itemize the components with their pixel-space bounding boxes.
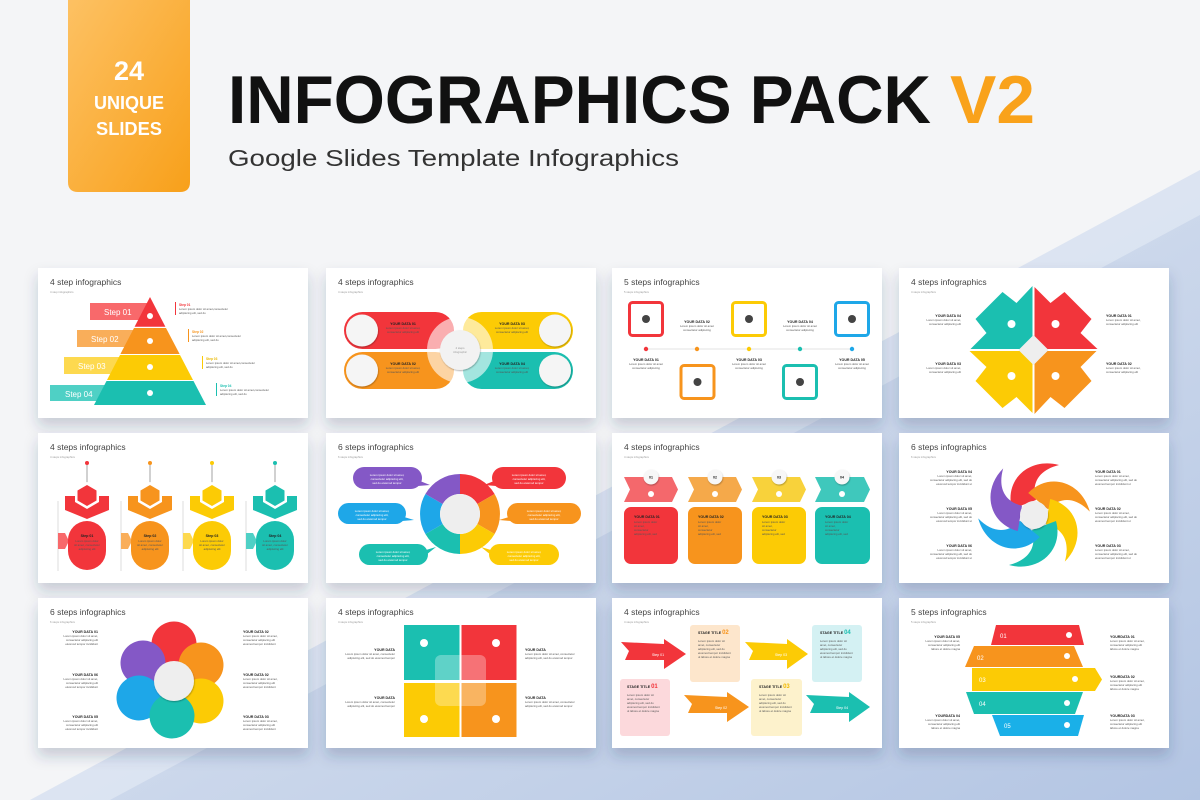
badge: 24 unique slides: SLIDES	[96, 119, 162, 139]
panel: slide 11 arrows and stages: Lorem ipsum dolor sit	[698, 639, 725, 643]
panel: slide 3 five steps: YOUR DATA 03	[736, 358, 762, 362]
panel: slide 1 pyramid: adipiscing elit, sed do	[192, 338, 219, 342]
panel: slide 2 capsules: YOUR DATA 02	[390, 362, 416, 366]
panel: slide 2 capsules	[326, 268, 596, 418]
panel: slide 9 flower: YOUR DATA 03	[243, 715, 269, 719]
panel: slide 7 chevrons and boxes: adipiscing elit, sed	[634, 532, 657, 536]
panel: slide 1 pyramid: Lorem ipsum dolor sit amet,consectetur	[192, 334, 241, 338]
panel: slide 9 flower: Lorem ipsum dolor sit amet,	[243, 634, 278, 638]
panel: slide 2 capsules: YOUR DATA 04	[499, 362, 525, 366]
panel: slide 11 arrows and stages: Lorem ipsum dolor sit	[759, 693, 786, 697]
panel: slide 12 hexagon bars: Lorem ipsum dolor sit amet,	[1110, 639, 1145, 643]
subtitle: Google Slides Template Infographics	[228, 145, 679, 171]
panel: slide 2 capsules: Lorem ipsum dolor sit amet,	[386, 326, 420, 330]
panel: slide 9 flower: eiusmod tempor incididunt	[65, 642, 98, 646]
panel: slide 12 hexagon bars: labore et dolore magna	[1110, 726, 1139, 730]
title: INFOGRAPHICS PACK	[228, 62, 931, 138]
panel: slide 11 arrows and stages: 4 steps infographics	[624, 620, 649, 624]
panel: slide 5 hexagon columns: 4 steps infographics	[50, 442, 126, 452]
panel: slide 9 flower: consectetur adipiscing elit	[243, 681, 275, 685]
panel: slide 7 chevrons and boxes: sit amet,	[634, 524, 645, 528]
panel: slide 4 cross: YOUR DATA 03	[935, 362, 961, 366]
panel: slide 9 flower: consectetur adipiscing elit	[66, 681, 98, 685]
panel: slide 2 capsules: YOUR DATA 01	[390, 322, 416, 326]
panel: slide 2 capsules: 4 steps infographics	[338, 290, 363, 294]
panel: slide 2 capsules: Lorem ipsum dolor sit amet,	[386, 366, 420, 370]
panel: slide 11 arrows and stages: amet, consectetur	[698, 643, 720, 647]
panel: slide 11 arrows and stages: Step 02	[715, 706, 727, 710]
panel: slide 10 quad: YOUR DATA	[374, 648, 395, 652]
panel: slide 5 hexagon columns: sit amet, consectetur	[74, 543, 100, 547]
panel: slide 1 pyramid: Step 01	[179, 303, 191, 307]
panel: slide 11 arrows and stages: eiusmod tempor incididunt	[820, 651, 853, 655]
panel: slide 8 spiral: eiusmod tempor incididunt ut	[936, 482, 972, 486]
panel: slide 10 quad: YOUR DATA	[374, 696, 395, 700]
panel: slide 3 five steps: consectetur adipiscing	[838, 366, 866, 370]
panel: slide 4 cross: YOUR DATA 01	[1106, 314, 1132, 318]
panel: slide 12 hexagon bars: labore et dolore magna	[1110, 687, 1139, 691]
panel: slide 8 spiral: YOUR DATA 06	[946, 544, 972, 548]
panel: slide 12 hexagon bars: YOURDATA 04	[935, 714, 960, 718]
panel: slide 7 chevrons and boxes: 4 steps infographics	[624, 455, 649, 459]
panel: slide 11 arrows and stages: 4 steps infographics	[624, 607, 700, 617]
panel: slide 1 pyramid: Step 03	[206, 357, 218, 361]
panel: slide 12 hexagon bars: consectetur adipiscing elit	[1110, 683, 1142, 687]
panel: slide 8 spiral: consectetur adipiscing elit, sed do	[930, 515, 972, 519]
panel: slide 4 cross: consectetur adipiscing elit	[929, 322, 961, 326]
panel: slide 4 cross: 4 steps infographics	[911, 290, 936, 294]
panel: slide 2 capsules: consectetur adipiscing elit	[496, 370, 528, 374]
panel: slide 6 donut with bubbles: Lorem ipsum dolor sit amet,	[527, 509, 561, 513]
panel: slide 5 hexagon columns: adipiscing elit	[204, 547, 221, 551]
panel: slide 12 hexagon bars: 02	[977, 656, 984, 662]
panel: slide 11 arrows and stages: ut labore et dolore magna	[820, 655, 852, 659]
panel: slide 6 donut with bubbles: 6 steps infographics	[338, 442, 414, 452]
panel: slide 1 pyramid: Step 02	[192, 330, 204, 334]
panel: slide 11 arrows and stages: adipiscing elit, sed do	[820, 647, 847, 651]
panel: slide 2 capsules: Lorem ipsum dolor sit amet,	[495, 326, 529, 330]
panel: slide 11 arrows and stages: amet, consectetur	[759, 697, 781, 701]
panel: slide 8 spiral: consectetur adipiscing elit, sed do	[930, 478, 972, 482]
panel: slide 11 arrows and stages: ut labore et dolore magna	[627, 709, 659, 713]
panel: slide 12 hexagon bars: Lorem ipsum dolor sit amet,	[925, 639, 960, 643]
panel: slide 9 flower: consectetur adipiscing elit	[66, 638, 98, 642]
panel: slide 12 hexagon bars: consectetur adipiscing elit	[928, 722, 960, 726]
panel: slide 9 flower: eiusmod tempor incididunt	[243, 642, 276, 646]
panel: slide 3 five steps: consectetur adipiscing	[735, 366, 763, 370]
panel: slide 11 arrows and stages: adipiscing elit, sed do	[698, 647, 725, 651]
panel: slide 10 quad: Lorem ipsum dolor sit amet, consectetur	[525, 700, 575, 704]
panel: slide 11 arrows and stages: ut labore et dolore magna	[698, 655, 730, 659]
panel: slide 1 pyramid: Lorem ipsum dolor sit amet,consectetur	[206, 361, 255, 365]
panel: slide 6 donut with bubbles: consectetur adipiscing elit,	[528, 513, 561, 517]
panel: slide 9 flower: consectetur adipiscing elit	[243, 723, 275, 727]
panel: slide 6 donut with bubbles	[326, 433, 596, 583]
panel: slide 7 chevrons and boxes: 4 steps infographics	[624, 442, 700, 452]
panel: slide 4 cross: Lorem ipsum dolor sit amet,	[1106, 318, 1141, 322]
panel: slide 7 chevrons and boxes	[612, 433, 882, 583]
panel: slide 1 pyramid: Step 03	[78, 362, 106, 371]
panel: slide 4 cross: Lorem ipsum dolor sit amet,	[926, 366, 961, 370]
panel: slide 3 five steps: YOUR DATA 01	[633, 358, 659, 362]
panel: slide 12 hexagon bars: labore et dolore magna	[1110, 647, 1139, 651]
title: V2	[950, 62, 1035, 138]
panel: slide 7 chevrons and boxes: YOUR DATA 04	[825, 515, 851, 519]
panel: slide 8 spiral: YOUR DATA 05	[946, 507, 972, 511]
panel: slide 11 arrows and stages: Step 04	[836, 706, 848, 710]
panel: slide 12 hexagon bars: labore et dolore magna	[931, 647, 960, 651]
panel: slide 8 spiral: 6 steps infographics	[911, 442, 987, 452]
panel: slide 6 donut with bubbles: sed do eiusmod tempor	[357, 517, 387, 521]
panel: slide 8 spiral: consectetur adipiscing elit, sed do	[930, 552, 972, 556]
panel: slide 3 five steps: consectetur adipiscing	[632, 366, 660, 370]
panel: slide 10 quad: 4 steps infographics	[338, 607, 414, 617]
panel: slide 4 cross: YOUR DATA 04	[935, 314, 961, 318]
panel: slide 9 flower: Lorem ipsum dolor sit amet,	[63, 634, 98, 638]
panel: slide 6 donut with bubbles: sed do eiusmod tempor	[514, 481, 544, 485]
badge: 24 unique slides: UNIQUE	[94, 93, 164, 113]
panel: slide 12 hexagon bars: 01	[1000, 634, 1007, 640]
panel: slide 5 hexagon columns: Lorem ipsum dolor	[200, 539, 224, 543]
panel: slide 11 arrows and stages: Lorem ipsum dolor sit	[820, 639, 847, 643]
panel: slide 9 flower: YOUR DATA 06	[72, 673, 98, 677]
panel: slide 5 hexagon columns: Step 01	[81, 534, 93, 538]
panel: slide 7 chevrons and boxes: Lorem ipsum dolor	[634, 520, 657, 524]
panel: slide 4 cross: 4 steps infographics	[911, 277, 987, 287]
panel: slide 8 spiral: eiusmod tempor incididunt ut	[1095, 519, 1131, 523]
panel: slide 8 spiral: YOUR DATA 04	[946, 470, 972, 474]
panel: slide 4 cross: consectetur adipiscing elit	[929, 370, 961, 374]
panel: slide 9 flower: consectetur adipiscing elit	[243, 638, 275, 642]
panel: slide 9 flower: 6 steps infographics	[50, 607, 126, 617]
panel: slide 3 five steps	[612, 268, 882, 418]
panel: slide 10 quad: Lorem ipsum dolor sit amet, consectetur	[525, 652, 575, 656]
panel: slide 7 chevrons and boxes: sit amet,	[825, 524, 836, 528]
panel: slide 5 hexagon columns: Lorem ipsum dolor	[75, 539, 99, 543]
panel: slide 5 hexagon columns: sit amet, consectetur	[262, 543, 288, 547]
panel: slide 7 chevrons and boxes: adipiscing elit, sed	[762, 532, 785, 536]
panel: slide 10 quad: 4 steps infographics	[338, 620, 363, 624]
panel: slide 6 donut with bubbles: sed do eiusmod tempor	[509, 558, 539, 562]
panel: slide 6 donut with bubbles: 6 steps infographics	[338, 455, 363, 459]
panel: slide 5 hexagon columns: Step 02	[144, 534, 156, 538]
panel: slide 7 chevrons and boxes: 02	[713, 476, 717, 480]
panel: slide 3 five steps: Lorem ipsum dolor sit amet	[732, 362, 766, 366]
panel: slide 12 hexagon bars: YOURDATA 02	[1110, 675, 1135, 679]
panel: slide 2 capsules: 4 steps infographics	[338, 277, 414, 287]
panel: slide 10 quad: adipiscing elit, sed do eiusmod tempor	[347, 656, 395, 660]
panel: slide 7 chevrons and boxes: Lorem ipsum dolor	[825, 520, 848, 524]
panel: slide 6 donut with bubbles: consectetur adipiscing elit,	[508, 554, 541, 558]
panel: slide 10 quad: Lorem ipsum dolor sit amet, consectetur	[345, 652, 395, 656]
panel: slide 3 five steps: Lorem ipsum dolor sit amet	[629, 362, 663, 366]
panel: slide 8 spiral: Lorem ipsum dolor sit amet,	[937, 548, 972, 552]
panel: slide 9 flower: 6 steps infographics	[50, 620, 75, 624]
panel: slide 10 quad: YOUR DATA	[525, 648, 546, 652]
panel: slide 4 cross	[899, 268, 1169, 418]
panel: slide 2 capsules: Lorem ipsum dolor sit amet,	[495, 366, 529, 370]
panel: slide 8 spiral: Lorem ipsum dolor sit amet,	[1095, 511, 1130, 515]
panel: slide 5 hexagon columns: adipiscing elit	[142, 547, 159, 551]
panel: slide 11 arrows and stages: Step 01	[652, 653, 664, 657]
panel: slide 10 quad: adipiscing elit, sed do eiusmod tempor	[525, 704, 573, 708]
panel: slide 4 cross: consectetur adipiscing elit	[1106, 322, 1138, 326]
badge: 24 unique slides: 24	[114, 56, 144, 86]
panel: slide 12 hexagon bars: 5 steps infographics	[911, 607, 987, 617]
panel: slide 3 five steps: Lorem ipsum dolor sit amet	[835, 362, 869, 366]
panel: slide 8 spiral: consectetur adipiscing elit, sed do	[1095, 552, 1137, 556]
panel: slide 8 spiral: Lorem ipsum dolor sit amet,	[1095, 474, 1130, 478]
panel: slide 12 hexagon bars: 05	[1004, 724, 1011, 730]
panel: slide 3 five steps: consectetur adipiscing	[786, 328, 814, 332]
panel: slide 6 donut with bubbles: Lorem ipsum dolor sit amet,	[507, 550, 541, 554]
panel: slide 9 flower: YOUR DATA 02	[243, 673, 269, 677]
panel: slide 6 donut with bubbles: consectetur adipiscing elit,	[513, 477, 546, 481]
panel: slide 11 arrows and stages: Lorem ipsum dolor sit	[627, 693, 654, 697]
panel: slide 5 hexagon columns: Lorem ipsum dolor	[138, 539, 162, 543]
panel: slide 10 quad: YOUR DATA	[525, 696, 546, 700]
panel: slide 12 hexagon bars	[899, 598, 1169, 748]
panel: slide 4 cross: YOUR DATA 02	[1106, 362, 1132, 366]
panel: slide 11 arrows and stages: ut labore et dolore magna	[759, 709, 791, 713]
panel: slide 8 spiral: YOUR DATA 03	[1095, 544, 1121, 548]
panel: slide 11 arrows and stages: adipiscing elit, sed do	[759, 701, 786, 705]
panel: slide 6 donut with bubbles: Lorem ipsum dolor sit amet,	[355, 509, 389, 513]
panel: slide 5 hexagon columns: adipiscing elit	[267, 547, 284, 551]
panel: slide 1 pyramid: Step 04	[220, 384, 232, 388]
panel: slide 2 capsules: 4 steps	[455, 346, 465, 350]
panel: slide 7 chevrons and boxes: consectetur	[762, 528, 777, 532]
panel: slide 11 arrows and stages: eiusmod tempor incididunt	[698, 651, 731, 655]
panel: slide 1 pyramid: Step 01	[104, 308, 132, 317]
panel: slide 7 chevrons and boxes: consectetur	[634, 528, 649, 532]
panel: slide 12 hexagon bars: Lorem ipsum dolor sit amet,	[925, 718, 960, 722]
panel: slide 5 hexagon columns: 4 steps infographics	[50, 455, 75, 459]
panel: slide 7 chevrons and boxes: 01	[649, 476, 653, 480]
panel: slide 1 pyramid: adipiscing elit, sed do	[220, 392, 247, 396]
panel: slide 6 donut with bubbles: Lorem ipsum dolor sit amet,	[376, 550, 410, 554]
panel: slide 10 quad: adipiscing elit, sed do eiusmod tempor	[525, 656, 573, 660]
panel: slide 8 spiral: eiusmod tempor incididunt ut	[1095, 556, 1131, 560]
panel: slide 12 hexagon bars: YOUR DATA 05	[934, 635, 960, 639]
panel: slide 7 chevrons and boxes: sit amet,	[762, 524, 773, 528]
panel: slide 9 flower: eiusmod tempor incididunt	[65, 685, 98, 689]
panel: slide 1 pyramid: Lorem ipsum dolor sit amet,consectetur	[220, 388, 269, 392]
panel: slide 9 flower: eiusmod tempor incididunt	[65, 727, 98, 731]
panel: slide 7 chevrons and boxes: adipiscing elit, sed	[825, 532, 848, 536]
panel: slide 6 donut with bubbles: Lorem ipsum dolor sit amet,	[370, 473, 404, 477]
panel: slide 5 hexagon columns: Step 04	[269, 534, 281, 538]
panel: slide 1 pyramid: 4 step infographics	[50, 277, 121, 287]
panel: slide 1 pyramid: adipiscing elit, sed do	[206, 365, 233, 369]
panel: slide 12 hexagon bars: consectetur adipiscing elit	[1110, 722, 1142, 726]
panel: slide 10 quad: Lorem ipsum dolor sit amet, consectetur	[345, 700, 395, 704]
panel: slide 2 capsules: consectetur adipiscing elit	[387, 370, 419, 374]
panel: slide 11 arrows and stages: Step 03	[775, 653, 787, 657]
panel: slide 8 spiral: Lorem ipsum dolor sit amet,	[937, 511, 972, 515]
panel: slide 1 pyramid: 4 step infographics	[50, 290, 74, 294]
panel: slide 11 arrows and stages: STAGE TITLE 02	[698, 630, 729, 636]
panel: slide 3 five steps: 5 steps infographics	[624, 277, 700, 287]
panel: slide 12 hexagon bars: Lorem ipsum dolor sit amet,	[1110, 718, 1145, 722]
panel: slide 11 arrows and stages	[612, 598, 882, 748]
panel: slide 5 hexagon columns: adipiscing elit	[79, 547, 96, 551]
panel: slide 11 arrows and stages: eiusmod tempor incididunt	[627, 705, 660, 709]
panel: slide 6 donut with bubbles: consectetur adipiscing elit,	[377, 554, 410, 558]
panel: slide 8 spiral: eiusmod tempor incididunt ut	[936, 519, 972, 523]
panel: slide 7 chevrons and boxes: sit amet,	[698, 524, 709, 528]
panel: slide 1 pyramid: Step 04	[65, 390, 93, 399]
panel: slide 12 hexagon bars: 03	[979, 678, 986, 684]
panel: slide 10 quad	[326, 598, 596, 748]
panel: slide 2 capsules: infographic	[453, 350, 467, 354]
panel: slide 4 cross: consectetur adipiscing elit	[1106, 370, 1138, 374]
panel: slide 5 hexagon columns: sit amet, consectetur	[137, 543, 163, 547]
panel: slide 7 chevrons and boxes: adipiscing elit, sed	[698, 532, 721, 536]
panel: slide 6 donut with bubbles: sed do eiusmod tempor	[529, 517, 559, 521]
panel: slide 9 flower: YOUR DATA 01	[72, 630, 98, 634]
panel: slide 12 hexagon bars: 04	[979, 702, 986, 708]
panel: slide 8 spiral: Lorem ipsum dolor sit amet,	[1095, 548, 1130, 552]
panel: slide 3 five steps: YOUR DATA 04	[787, 320, 813, 324]
panel: slide 12 hexagon bars: consectetur adipiscing elit	[928, 643, 960, 647]
panel: slide 11 arrows and stages: eiusmod tempor incididunt	[759, 705, 792, 709]
panel: slide 3 five steps: Lorem ipsum dolor sit amet	[783, 324, 817, 328]
panel: slide 3 five steps: YOUR DATA 05	[839, 358, 865, 362]
panel: slide 6 donut with bubbles: consectetur adipiscing elit,	[356, 513, 389, 517]
panel: slide 6 donut with bubbles: Lorem ipsum dolor sit amet,	[512, 473, 546, 477]
panel: slide 9 flower: eiusmod tempor incididunt	[243, 685, 276, 689]
panel: slide 7 chevrons and boxes: consectetur	[825, 528, 840, 532]
panel: slide 7 chevrons and boxes: YOUR DATA 03	[762, 515, 788, 519]
panel: slide 4 cross: Lorem ipsum dolor sit amet,	[1106, 366, 1141, 370]
panel: slide 11 arrows and stages: amet, consectetur	[820, 643, 842, 647]
panel: slide 11 arrows and stages: STAGE TITLE 04	[820, 630, 851, 636]
panel: slide 8 spiral: consectetur adipiscing elit, sed do	[1095, 478, 1137, 482]
panel: slide 8 spiral: eiusmod tempor incididunt ut	[1095, 482, 1131, 486]
panel: slide 1 pyramid: adipiscing elit, sed do	[179, 311, 206, 315]
panel: slide 2 capsules: consectetur adipiscing elit	[387, 330, 419, 334]
panel: slide 3 five steps: consectetur adipiscing	[683, 328, 711, 332]
panel: slide 6 donut with bubbles: consectetur adipiscing elit,	[371, 477, 404, 481]
panel: slide 9 flower: Lorem ipsum dolor sit amet,	[63, 719, 98, 723]
panel: slide 9 flower: Lorem ipsum dolor sit amet,	[243, 719, 278, 723]
panel: slide 12 hexagon bars: YOURDATA 03	[1110, 714, 1135, 718]
panel: slide 9 flower: Lorem ipsum dolor sit amet,	[243, 677, 278, 681]
panel: slide 1 pyramid: Lorem ipsum dolor sit amet,consectetur	[179, 307, 228, 311]
panel: slide 3 five steps: Lorem ipsum dolor sit amet	[680, 324, 714, 328]
panel: slide 2 capsules: consectetur adipiscing elit	[496, 330, 528, 334]
panel: slide 8 spiral: YOUR DATA 01	[1095, 470, 1121, 474]
panel: slide 2 capsules: YOUR DATA 03	[499, 322, 525, 326]
panel: slide 7 chevrons and boxes: consectetur	[698, 528, 713, 532]
panel: slide 9 flower: Lorem ipsum dolor sit amet,	[63, 677, 98, 681]
panel: slide 8 spiral: 6 steps infographics	[911, 455, 936, 459]
panel: slide 11 arrows and stages: STAGE TITLE 03	[759, 684, 790, 690]
panel: slide 8 spiral: Lorem ipsum dolor sit amet,	[937, 474, 972, 478]
badge: 24 unique slides	[68, 0, 190, 192]
panel: slide 7 chevrons and boxes: YOUR DATA 01	[634, 515, 660, 519]
panel: slide 7 chevrons and boxes: 04	[840, 476, 844, 480]
panel: slide 9 flower: YOUR DATA 05	[72, 715, 98, 719]
panel: slide 9 flower: consectetur adipiscing elit	[66, 723, 98, 727]
panel: slide 10 quad: adipiscing elit, sed do eiusmod tempor	[347, 704, 395, 708]
panel: slide 9 flower	[38, 598, 308, 748]
panel: slide 5 hexagon columns	[38, 433, 308, 583]
panel: slide 12 hexagon bars: consectetur adipiscing elit	[1110, 643, 1142, 647]
panel: slide 9 flower: eiusmod tempor incididunt	[243, 727, 276, 731]
panel: slide 12 hexagon bars: 5 steps infographics	[911, 620, 936, 624]
panel: slide 3 five steps: YOUR DATA 02	[684, 320, 710, 324]
panel: slide 7 chevrons and boxes: 03	[777, 476, 781, 480]
panel: slide 8 spiral: eiusmod tempor incididunt ut	[936, 556, 972, 560]
panel: slide 12 hexagon bars: labore et dolore magna	[931, 726, 960, 730]
panel: slide 6 donut with bubbles: sed do eiusmod tempor	[378, 558, 408, 562]
panel: slide 8 spiral: consectetur adipiscing elit, sed do	[1095, 515, 1137, 519]
panel: slide 11 arrows and stages: adipiscing elit, sed do	[627, 701, 654, 705]
panel: slide 9 flower: YOUR DATA 02	[243, 630, 269, 634]
panel: slide 1 pyramid	[38, 268, 308, 418]
panel: slide 8 spiral: YOUR DATA 02	[1095, 507, 1121, 511]
panel: slide 5 hexagon columns: Lorem ipsum dolor	[263, 539, 287, 543]
panel: slide 5 hexagon columns: sit amet, consectetur	[199, 543, 225, 547]
panel: slide 11 arrows and stages: STAGE TITLE 01	[627, 684, 658, 690]
panel: slide 7 chevrons and boxes: Lorem ipsum dolor	[698, 520, 721, 524]
panel: slide 5 hexagon columns: Step 03	[206, 534, 218, 538]
panel: slide 12 hexagon bars: YOURDATA 01	[1110, 635, 1135, 639]
panel: slide 7 chevrons and boxes: YOUR DATA 02	[698, 515, 724, 519]
panel: slide 8 spiral	[899, 433, 1169, 583]
panel: slide 12 hexagon bars: Lorem ipsum dolor sit amet,	[1110, 679, 1145, 683]
panel: slide 3 five steps: 5 steps infographics	[624, 290, 649, 294]
panel: slide 1 pyramid: Step 02	[91, 335, 119, 344]
panel: slide 7 chevrons and boxes: Lorem ipsum dolor	[762, 520, 785, 524]
panel: slide 6 donut with bubbles: sed do eiusmod tempor	[372, 481, 402, 485]
panel: slide 4 cross: Lorem ipsum dolor sit amet,	[926, 318, 961, 322]
panel: slide 11 arrows and stages: amet, consectetur	[627, 697, 649, 701]
